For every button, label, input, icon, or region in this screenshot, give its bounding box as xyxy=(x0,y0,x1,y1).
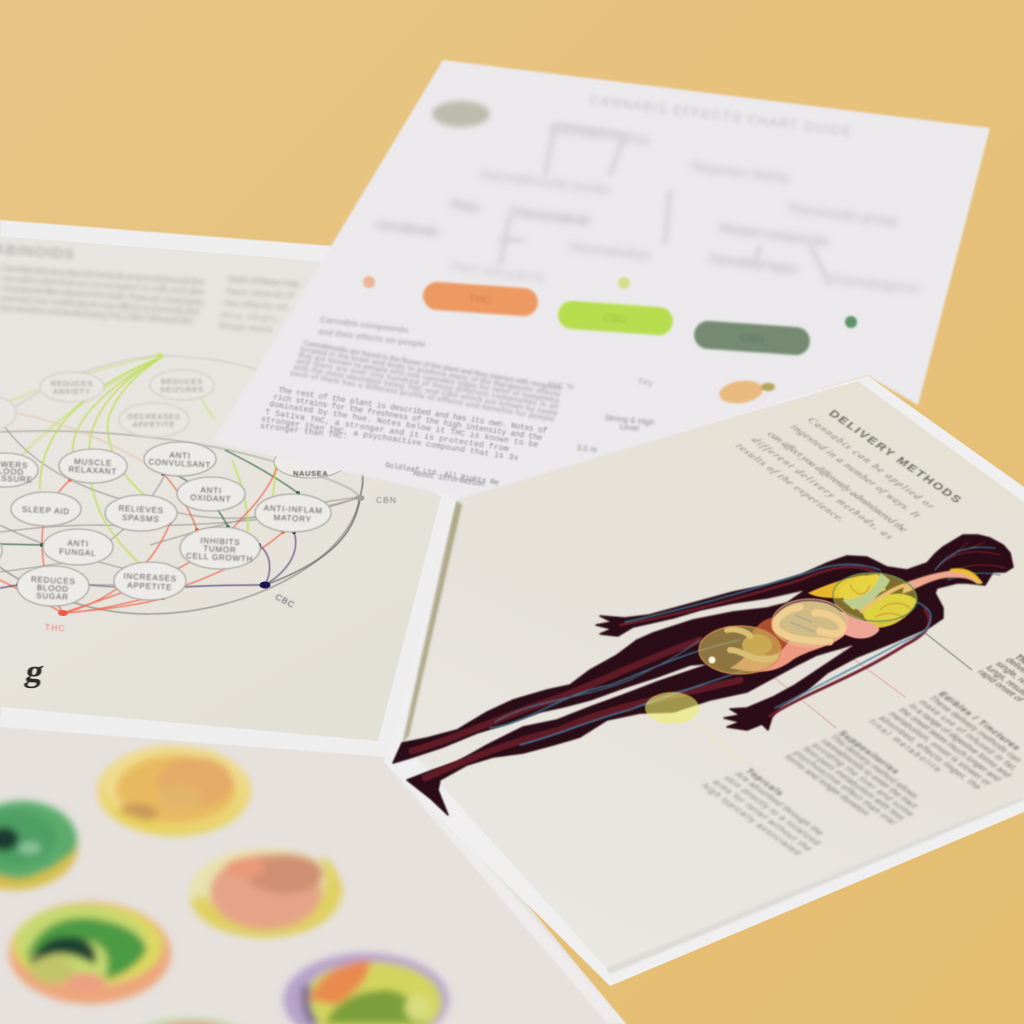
node labels, sharp area: APPETITE xyxy=(127,581,172,592)
family tree chart labels: Flavonoids group xyxy=(788,201,899,228)
node labels, sharp area: CONVULSANT xyxy=(148,457,211,470)
text block: delivery introduction: ingested in a number of ways. It xyxy=(787,424,923,520)
pill: green CBD: CBD xyxy=(603,312,627,326)
caption: topicals xyxy=(699,768,827,856)
text block: card side note: Each of these may xyxy=(228,274,301,290)
footer: copyright: About Information xyxy=(413,470,485,489)
caption: topicals: Topicals xyxy=(743,768,787,796)
family tree chart labels: Phyto xyxy=(449,197,481,215)
body text: paragraph one xyxy=(290,338,562,424)
circle: yellow and orange xyxy=(97,746,251,836)
heading: chart title: CANNABIS EFFECTS CHART GUIDE xyxy=(589,92,853,139)
node labels, sharp area: RELAXANT xyxy=(68,465,117,476)
node: relieves spasms xyxy=(105,495,177,531)
node: upper right xyxy=(150,370,214,400)
body text: paragraph two xyxy=(260,386,548,463)
body text: paragraph one: that are known to people who use cannabis today for relief of symptoms xyxy=(298,350,560,405)
table values: Strong & High xyxy=(604,413,655,427)
oesophagus and throat xyxy=(902,568,983,594)
table values: Tiny xyxy=(637,377,653,388)
node labels, sharp area: OXIDANT xyxy=(190,493,232,504)
circle: partial peach at card edge xyxy=(132,1018,248,1024)
family tree connectors xyxy=(500,125,830,285)
family tree chart labels xyxy=(374,121,920,296)
hub: THC xyxy=(58,610,68,616)
family tree chart labels: Related compounds xyxy=(719,221,830,248)
family tree chart labels: Cannabinoids xyxy=(374,217,441,239)
circle: green xyxy=(0,801,78,890)
pill: orange THC: THC xyxy=(468,293,492,307)
panel: cannabinoid effects network card xyxy=(0,220,470,757)
node labels, sharp area: FUNGAL xyxy=(59,547,97,558)
caption: edibles and tinctures: absorbed, effects linger, the xyxy=(876,715,984,790)
caption: edibles and tinctures: metabolism, onset is slower or xyxy=(886,711,994,786)
table values: Level xyxy=(619,422,640,433)
node labels, sharp area: ANTI xyxy=(67,538,89,549)
text block: card introduction: neurotransmitter release in the brain. There are many types xyxy=(0,283,205,308)
family tree chart labels: Cannabis sativa xyxy=(549,121,651,147)
node labels, blurred area xyxy=(51,377,204,429)
node labels, sharp area: MUSCLE xyxy=(74,457,112,468)
caption: edibles and tinctures: make use of infused in fat, xyxy=(916,699,1021,772)
body text: paragraph one: and there are over one hundred of these different compounds in all xyxy=(296,356,559,411)
dark connection from CBN xyxy=(265,470,363,585)
caption: edibles and tinctures: final metabolite xyxy=(866,719,945,773)
node labels, sharp area xyxy=(0,449,323,602)
node: muscle relaxant xyxy=(59,449,127,483)
text block: card introduction: cannabis plant that act on receptors in cells and alter xyxy=(0,273,205,298)
organ: stomach and pink abdominal area xyxy=(730,601,846,672)
body text: paragraph one: with the most abundant being THC and CBD which are known by name xyxy=(292,362,558,418)
caption: suppositories: Suppositories xyxy=(836,730,902,775)
caption: suppositories: This delivery method allows xyxy=(827,734,922,800)
node labels, sharp area: ANTI xyxy=(169,450,191,461)
family tree chart labels: Cannabidiol xyxy=(569,239,650,263)
caption: suppositories: cannabinoids to enter the tract xyxy=(818,738,921,809)
marker: dark green dot xyxy=(845,316,857,328)
heading: delivery methods: DELIVERY METHODS xyxy=(826,407,964,505)
network diagram xyxy=(0,355,363,614)
red THC connections xyxy=(0,410,283,613)
caption: topicals: high typically associated xyxy=(699,783,804,856)
blood vessels xyxy=(412,542,1005,778)
node labels, sharp area: RELIEVES xyxy=(118,504,164,515)
node: anti oxidant xyxy=(177,477,245,511)
label: THC: THC xyxy=(45,622,66,633)
node labels, blurred area: SEIZURES xyxy=(160,385,204,394)
text block: card side note xyxy=(219,274,301,336)
pill: orange THC xyxy=(422,281,539,317)
caption: suppositories xyxy=(782,730,922,825)
effect nodes, sharp area xyxy=(0,442,331,606)
text block: delivery introduction: can affect you differently administered the xyxy=(764,431,910,534)
light green connections xyxy=(0,355,276,564)
illustration: human body with circulatory system and organs xyxy=(393,535,1013,815)
node labels, sharp area: ANTI xyxy=(200,485,222,496)
text block: card introduction: Cannabinoids are a class of chemical compounds found in the xyxy=(0,263,205,288)
body text: paragraph two: stronger than THC. xyxy=(260,422,348,442)
node labels, sharp area: REDUCES xyxy=(31,575,76,586)
body text: paragraph one: each of them has a different profile of effects and benefits for people xyxy=(290,368,555,424)
node hidden under the chart card: NAUSEA xyxy=(293,469,328,478)
family tree chart labels: Tetrahydro xyxy=(449,259,545,285)
node: lowers blood pressure xyxy=(0,453,38,487)
node labels, sharp area: SLEEP AID xyxy=(22,505,70,516)
node labels, sharp area: BLOOD xyxy=(37,583,69,594)
caption: topicals: skin directly to a localized xyxy=(721,775,824,846)
logo: g: g xyxy=(22,655,47,689)
leader lines from body to captions xyxy=(692,617,972,762)
family tree chart labels: Cannabinol types xyxy=(708,251,800,276)
caption: topicals: Are absorbed through the xyxy=(732,771,827,836)
caption: edibles and tinctures: in a range of digestive forms and xyxy=(906,703,1014,778)
organ: intestines xyxy=(727,629,776,659)
connection end dots xyxy=(16,472,300,600)
hub: CBC xyxy=(260,582,270,588)
text block: card introduction: and each one contributes its own effects on the body and xyxy=(0,293,200,318)
text block: card side note: this chart. xyxy=(221,310,279,325)
text block: delivery introduction: Cannabis can be applied or xyxy=(804,417,937,510)
caption: inhalation xyxy=(975,653,1024,709)
hub: CBN xyxy=(356,495,364,501)
highlight circles on body xyxy=(645,570,919,724)
organ: lungs under highlight circle xyxy=(808,572,917,639)
body text: paragraph two: stronger than THC, a psychoactive compound that is 3x xyxy=(261,415,519,463)
table values: 3.5 nt xyxy=(576,443,598,454)
node labels, sharp area: SUGAR xyxy=(36,591,69,602)
node labels, sharp area: MATORY xyxy=(273,513,312,524)
node: partial left edge xyxy=(0,541,3,559)
node labels, blurred area: APPETITE xyxy=(133,420,175,429)
node: anti fungal xyxy=(43,529,113,565)
label: CBN: CBN xyxy=(376,495,397,505)
text block: card introduction xyxy=(0,263,205,328)
circle: peach and salmon xyxy=(189,848,343,938)
caption: topicals: area for relief without the xyxy=(710,779,815,852)
effect nodes, blurred area xyxy=(0,370,214,437)
body text: paragraph two: dominated by the hue. Notes below it THC is known to be xyxy=(269,400,539,450)
caption: edibles and tinctures: the onset takes much longer and xyxy=(896,707,1004,782)
footer: copyright: Goldleaf Ltd. All Rights Re xyxy=(385,462,499,488)
body text: section heading xyxy=(318,314,426,349)
family tree chart labels: Cannabigerol xyxy=(829,271,920,296)
node hidden under the chart card xyxy=(274,455,342,478)
node labels, sharp area: INCREASES xyxy=(123,572,177,583)
panel: delivery methods card xyxy=(384,376,1024,986)
circle: green crescent and orange xyxy=(9,902,171,1004)
text block: card side note: Read more xyxy=(219,321,274,336)
node labels, sharp area: CELL GROWTH xyxy=(186,551,253,564)
node labels, blurred area: REDUCES xyxy=(161,377,203,386)
node labels, sharp area: TUMOR xyxy=(203,544,237,555)
text block: card introduction: the mind, the most studied being THC, CBD, CBN and CBC xyxy=(0,303,195,328)
hub: CBD xyxy=(157,353,163,359)
node: inhibits tumor cell growth xyxy=(180,527,260,569)
node: upper middle xyxy=(119,403,189,437)
node: anti convulsant xyxy=(144,442,216,476)
node: reduces blood sugar xyxy=(17,566,89,606)
body text: paragraph one: Cannabinoids are found in the flower of the plant and they interact with receptors xyxy=(303,338,562,392)
outer orbit rings xyxy=(0,356,360,614)
caption: suppositories: avoiding the liver and some xyxy=(809,742,917,817)
caption: suppositories: first-pass metabolism with less xyxy=(800,746,909,822)
panel: effects chart card xyxy=(213,60,990,498)
dark green connections xyxy=(0,450,298,545)
node labels, blurred area: REDUCES xyxy=(51,379,93,388)
shadow cast by overlapping card xyxy=(402,500,462,745)
family tree chart labels: Cannabinoid acids xyxy=(479,167,610,197)
family tree chart labels: Terpenes family xyxy=(689,159,790,185)
marker: orange dot xyxy=(363,276,375,288)
family tree chart labels: Endocannabinoid xyxy=(510,204,591,228)
node labels, sharp area: INHIBITS xyxy=(200,536,241,547)
caption: edibles and tinctures: These delivery methods can xyxy=(926,695,1024,763)
body text: section heading: Cannabis compounds xyxy=(320,314,409,335)
caption: edibles and tinctures: Edibles / Tinctures xyxy=(936,691,1023,751)
node: increases appetite xyxy=(114,562,186,600)
caption: edibles and tinctures xyxy=(866,691,1024,790)
node: far left xyxy=(0,397,16,429)
caption: suppositories: forms and longer duration xyxy=(782,754,873,816)
node: sleep aid xyxy=(11,492,81,526)
marker: green dot xyxy=(618,277,630,289)
table values: THC % xyxy=(548,380,574,392)
purple CBC connections xyxy=(0,532,296,588)
label: CBC: CBC xyxy=(274,592,297,610)
text block: card side note: have several of xyxy=(226,286,295,302)
table values xyxy=(548,377,655,454)
node labels, sharp area: ANTI-INFLAM xyxy=(263,503,323,516)
node labels, blurred area: DECREASES xyxy=(127,412,181,421)
text block: delivery introduction: different delivery methods, as xyxy=(748,437,896,541)
pill: dark green CBN xyxy=(693,320,811,356)
body text: paragraph two: The rest of the plant is described and has its own. Notes of xyxy=(278,386,548,436)
panel: bottom card with colour circles xyxy=(0,715,626,1024)
pill: green CBD xyxy=(557,300,674,336)
circle: purple, orange and green xyxy=(283,953,449,1024)
body silhouette xyxy=(393,535,1013,815)
pill: dark green CBN: CBN xyxy=(740,332,764,346)
text block: delivery introduction xyxy=(732,417,937,541)
icon: logo seal xyxy=(432,101,490,127)
caption: suppositories: psychoactive effect than oral xyxy=(791,750,899,825)
text block: card side note: the effects on xyxy=(224,298,288,313)
body text: paragraph two: T Sativa THC, a stronger and it is protected from xyxy=(265,408,509,454)
body text: paragraph one: located in the brain and body to produce many of the therapeutic effects xyxy=(300,344,561,399)
node: upper left xyxy=(40,372,104,402)
grey connections xyxy=(0,420,360,585)
icon: peach leaf xyxy=(718,378,775,406)
node labels, blurred area: ANXIETY xyxy=(53,387,91,396)
body text: section heading: and their effects on people xyxy=(318,326,426,349)
node: anti-inflammatory xyxy=(255,494,331,532)
node labels, sharp area: SPASMS xyxy=(122,513,160,524)
body text: paragraph two: rich strains for the freshness of the high intensity and the xyxy=(273,393,543,443)
text block: delivery introduction: results of the experience. xyxy=(732,443,847,523)
